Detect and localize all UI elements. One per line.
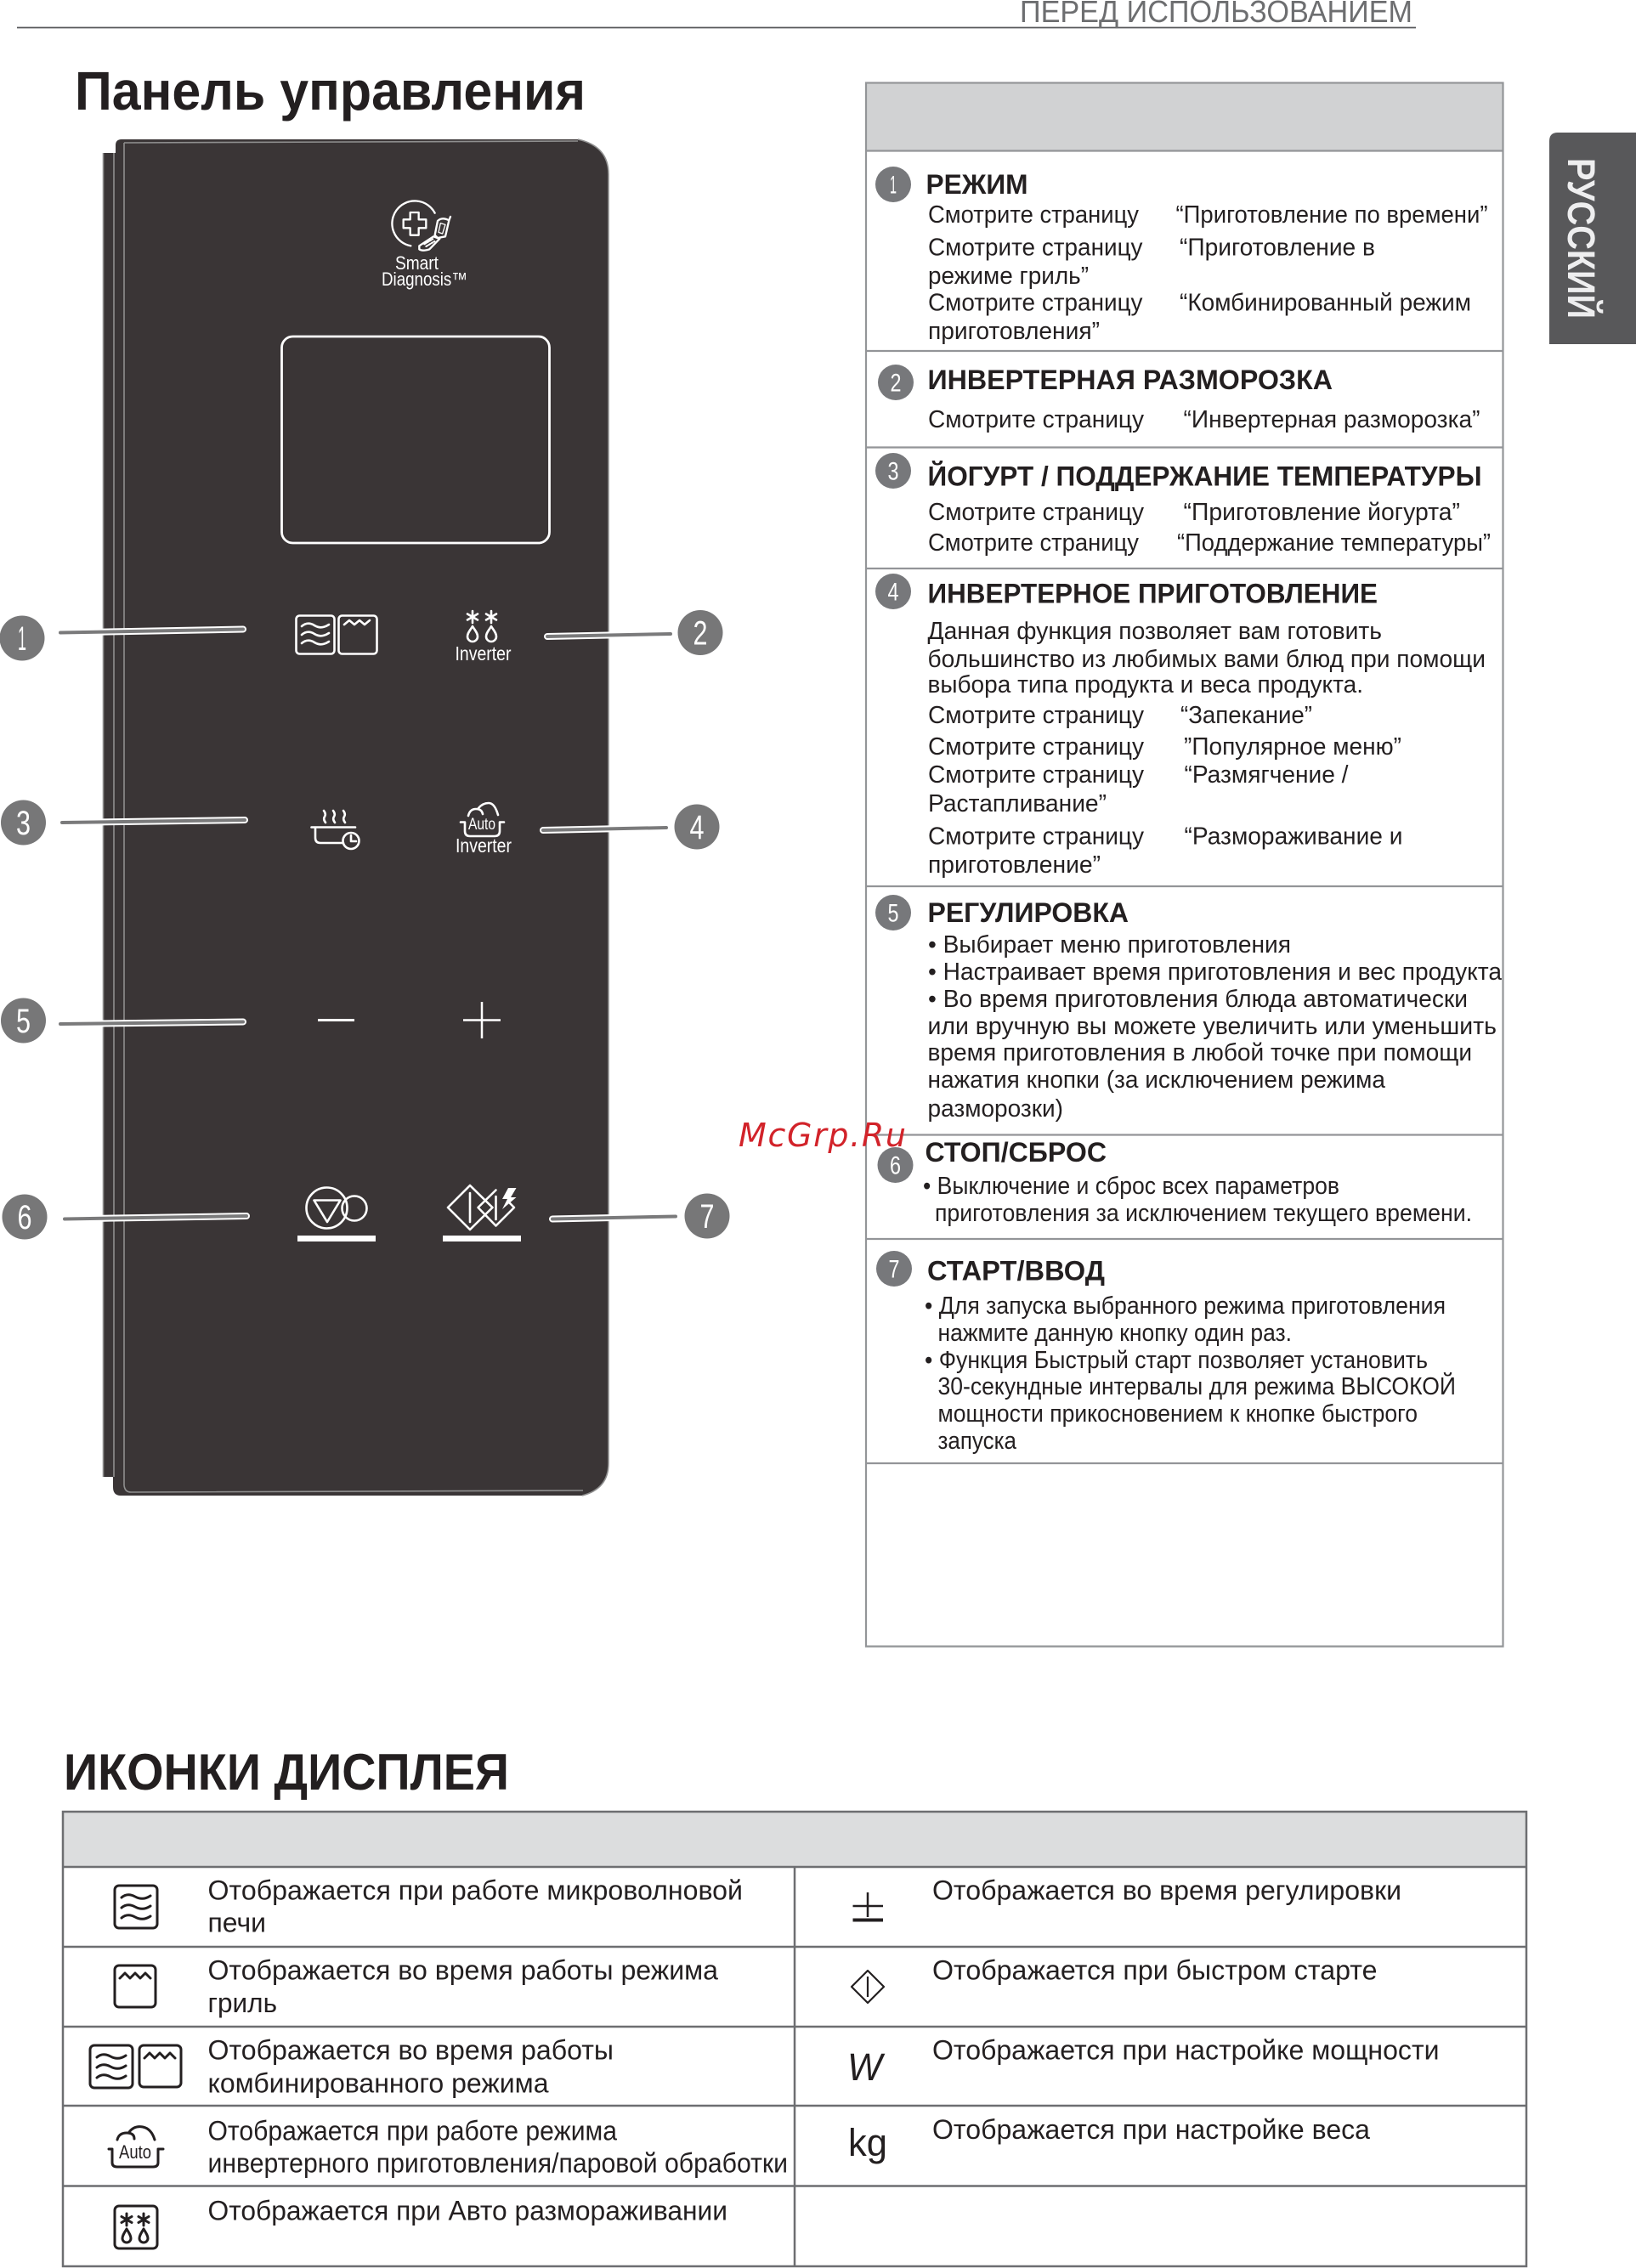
- row: grill: [115, 1954, 718, 2018]
- row 4: inverter cooking: “Запекание”: [1180, 702, 1312, 729]
- row 4: inverter cooking: “Размораживание и: [1185, 823, 1402, 850]
- row 3: yogurt: “Приготовление йогурта”: [1183, 499, 1460, 526]
- row 4: inverter cooking: [875, 574, 1486, 879]
- callout 2: [547, 610, 722, 655]
- row: microwave: печи: [207, 1907, 266, 1937]
- row: auto defrost: Отображается при Авто размораживании: [207, 2196, 727, 2226]
- callout 6: 6: [17, 1199, 32, 1236]
- icon: smart diagnosis: [382, 201, 467, 290]
- icon: auto inverter: Inverter: [456, 834, 512, 857]
- icon: minus: [318, 1019, 354, 1021]
- icon: auto inverter: [109, 2127, 163, 2167]
- row: quick start: Отображается при быстром старте: [932, 1954, 1377, 1985]
- row 2: inverter defrost: “Инвертерная разморозка”: [1183, 406, 1480, 433]
- panel: microwave control panel: [103, 139, 609, 1496]
- row 1: mode: приготовления”: [928, 318, 1100, 345]
- row: auto inverter: Отображается при работе режима: [207, 2116, 617, 2146]
- row 3: yogurt: Смотрите страницу: [928, 529, 1139, 557]
- icon: microwave and grill: [90, 2045, 181, 2088]
- row 4: inverter cooking: Смотрите страницу: [928, 702, 1144, 729]
- callout 3: [1, 800, 245, 845]
- icon: watt: W: [847, 2045, 886, 2089]
- row 7: start enter: 7: [889, 1256, 899, 1283]
- panel: display icons table: [63, 1812, 1526, 2266]
- heading: display icons: ИКОНКИ ДИСПЛЕЯ: [64, 1744, 509, 1801]
- row 4: inverter cooking: 4: [887, 578, 899, 607]
- icon: smart diagnosis: Smart: [395, 252, 439, 274]
- row: power: Отображается при настройке мощности: [932, 2034, 1440, 2065]
- row 6: stop reset: приготовления за исключением текущего времени.: [935, 1200, 1472, 1227]
- icon: defrost: [115, 2206, 157, 2248]
- callout 5: [1, 998, 243, 1044]
- row: quick start: [852, 1954, 1377, 2003]
- row: auto inverter: инвертерного приготовления/паровой обработки: [207, 2148, 788, 2179]
- row 4: inverter cooking: выбора типа продукта и веса продукта.: [928, 671, 1363, 698]
- row 7: start enter: запуска: [938, 1428, 1017, 1455]
- language tab: РУССКИЙ: [1560, 158, 1603, 319]
- row 5: adjustment: [875, 895, 1503, 1123]
- icon: inverter defrost: [456, 611, 512, 665]
- row 5: adjustment: • Настраивает время приготовления и вес продукта: [928, 959, 1503, 986]
- title: control panel: Панель управления: [75, 60, 586, 122]
- icon: microwave: [115, 1886, 157, 1928]
- icon: start diamond: [852, 1971, 884, 2003]
- row: combination: Отображается во время работы: [207, 2034, 614, 2065]
- icon: auto inverter: Auto: [468, 816, 495, 834]
- icon: auto inverter: [456, 803, 512, 857]
- row 4: inverter cooking: Смотрите страницу: [928, 733, 1144, 761]
- row 1: mode: “Приготовление по времени”: [1176, 201, 1487, 229]
- row 1: mode: Смотрите страницу: [928, 289, 1143, 316]
- row 3: yogurt: [875, 453, 1491, 557]
- row 4: inverter cooking: Растапливание”: [928, 790, 1107, 817]
- display window: [282, 337, 549, 543]
- row 1: mode: “Комбинированный режим: [1180, 289, 1471, 316]
- row 1: mode: Смотрите страницу: [928, 235, 1143, 262]
- language tab: [1549, 133, 1636, 344]
- row 2: inverter defrost: ИНВЕРТЕРНАЯ РАЗМОРОЗКА: [928, 365, 1333, 395]
- row: auto inverter: [109, 2116, 788, 2179]
- row 1: mode: 1: [890, 172, 897, 199]
- row: adjustment: Отображается во время регулировки: [932, 1875, 1401, 1905]
- row 5: adjustment: 5: [887, 899, 899, 928]
- row 4: inverter cooking: большинство из любимых вами блюд при помощи: [928, 646, 1486, 673]
- icon: smart diagnosis: Diagnosis™: [382, 269, 467, 290]
- row: combination: [90, 2034, 614, 2099]
- icon: plus minus: [853, 1892, 883, 1920]
- row 4: inverter cooking: Данная функция позволяет вам готовить: [928, 618, 1382, 645]
- row: combination: комбинированного режима: [207, 2068, 549, 2099]
- callout 3: 3: [16, 805, 31, 842]
- row 4: inverter cooking: Смотрите страницу: [928, 761, 1144, 789]
- row 5: adjustment: разморозки): [928, 1095, 1063, 1123]
- row 3: yogurt: ЙОГУРТ / ПОДДЕРЖАНИЕ ТЕМПЕРАТУРЫ: [928, 461, 1482, 491]
- row 4: inverter cooking: “Размягчение /: [1185, 761, 1349, 789]
- row 2: inverter defrost: 2: [891, 369, 901, 398]
- row 3: yogurt: 3: [887, 457, 899, 486]
- row 5: adjustment: РЕГУЛИРОВКА: [928, 897, 1129, 928]
- row: adjustment: [853, 1875, 1401, 1920]
- row 1: mode: РЕЖИМ: [926, 169, 1028, 200]
- row 7: start enter: СТАРТ/ВВОД: [927, 1256, 1105, 1287]
- row 3: yogurt: Смотрите страницу: [928, 499, 1144, 526]
- callout 1: 1: [18, 620, 26, 658]
- row 5: adjustment: • Во время приготовления блюда автоматически: [928, 986, 1468, 1013]
- row 7: start enter: 30-секундные интервалы для режима ВЫСОКОЙ: [938, 1372, 1456, 1400]
- row 7: start enter: [876, 1251, 1456, 1455]
- row 4: inverter cooking: ИНВЕРТЕРНОЕ ПРИГОТОВЛЕНИЕ: [928, 578, 1378, 608]
- row: microwave: [115, 1875, 743, 1937]
- watermark: McGrp.Ru: [739, 1117, 906, 1154]
- row 4: inverter cooking: приготовление”: [928, 851, 1101, 879]
- callout 6: [2, 1195, 246, 1239]
- row: power: [847, 2034, 1440, 2089]
- row 6: stop reset: • Выключение и сброс всех параметров: [923, 1173, 1339, 1200]
- icon: yogurt keep warm: [311, 811, 359, 849]
- row: microwave: Отображается при работе микроволновой: [207, 1875, 743, 1905]
- row 7: start enter: нажмите данную кнопку один раз.: [938, 1320, 1292, 1347]
- row 7: start enter: мощности прикосновением к кнопке быстрого: [938, 1400, 1418, 1428]
- icon: microwave and grill: [296, 615, 377, 654]
- row: weight: Отображается при настройке веса: [932, 2114, 1370, 2145]
- row 5: adjustment: нажатия кнопки (за исключением режима: [928, 1066, 1386, 1094]
- icon: kg: kg: [848, 2121, 887, 2164]
- row: auto defrost: [115, 2196, 727, 2248]
- callout 4: [543, 804, 719, 850]
- callout 7: 7: [700, 1198, 714, 1236]
- callout 2: 2: [693, 615, 707, 653]
- row 6: stop reset: СТОП/СБРОС: [925, 1137, 1107, 1168]
- icon: inverter defrost: Inverter: [456, 642, 512, 665]
- icon: auto inverter: Auto: [119, 2141, 151, 2163]
- callout 1: [0, 615, 243, 661]
- row 1: mode: “Приготовление в: [1180, 235, 1375, 262]
- row 1: mode: режиме гриль”: [928, 263, 1089, 290]
- callout 7: [552, 1193, 729, 1239]
- row 7: start enter: • Для запуска выбранного режима приготовления: [925, 1292, 1446, 1320]
- row 7: start enter: • Функция Быстрый старт позволяет установить: [925, 1347, 1428, 1374]
- icon: plus: [463, 1002, 501, 1038]
- row: grill: Отображается во время работы режима: [207, 1954, 718, 1985]
- icon: grill: [115, 1965, 156, 2007]
- row 6: stop reset: [877, 1137, 1472, 1227]
- callout 4: 4: [690, 809, 704, 846]
- callout 5: 5: [16, 1003, 31, 1040]
- row: weight: [848, 2114, 1370, 2164]
- row 2: inverter defrost: [878, 365, 1480, 433]
- row 5: adjustment: время приготовления в любой точке при помощи: [928, 1039, 1472, 1066]
- row 2: inverter defrost: Смотрите страницу: [928, 406, 1144, 433]
- row 4: inverter cooking: ”Популярное меню”: [1184, 733, 1401, 761]
- row 1: mode: [875, 167, 1487, 345]
- row: grill: гриль: [207, 1988, 277, 2018]
- icon: stop button: [297, 1188, 376, 1241]
- panel: button description table: [866, 83, 1503, 1647]
- row 1: mode: Смотрите страницу: [928, 201, 1139, 229]
- row 6: stop reset: 6: [890, 1152, 901, 1179]
- row 4: inverter cooking: Смотрите страницу: [928, 823, 1144, 850]
- row 3: yogurt: “Поддержание температуры”: [1177, 529, 1491, 557]
- row 5: adjustment: • Выбирает меню приготовления: [928, 931, 1291, 959]
- icon: start button: [443, 1185, 521, 1241]
- row 5: adjustment: или вручную вы можете увеличить или уменьшить: [928, 1013, 1497, 1040]
